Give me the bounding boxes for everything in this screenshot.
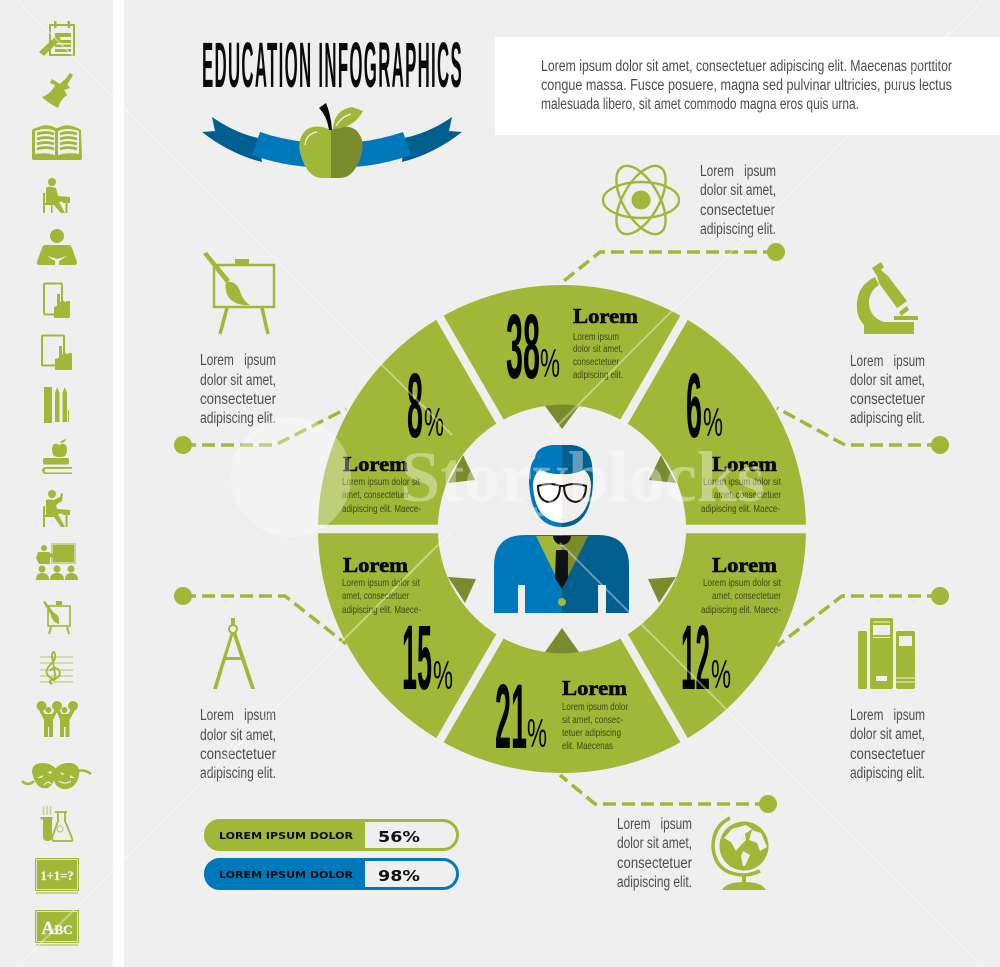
segment: 38%: Lorem [573,304,639,328]
icon: tablet with hand [42,336,72,370]
icon: books [858,618,915,689]
label: globe text: dolor sit amet, [617,835,692,852]
segment: 12%: Lorem [712,553,778,577]
icon: math board: 1+1=? [40,869,74,883]
icon: teacher at board [36,544,78,580]
icon: reading person [37,229,77,265]
segment: 12% [681,553,781,709]
segment: 21%: 21 [495,666,527,768]
icon: alphabet board [35,910,79,946]
segment: 21%: Lorem ipsum dolor [562,701,628,713]
segment: 6%: Lorem ipsum dolor sit [703,476,781,488]
connector dots [174,243,949,813]
segment: 8%: Lorem [343,452,409,476]
segment: 38%: adipiscing elit. [573,369,623,381]
label: atom text: adipiscing elit. [700,221,776,238]
segment: 21%: % [527,712,547,756]
segment: 8%: amet, consectetuer [342,489,409,501]
icon: alphabet board: ABC [41,918,73,938]
progress bar: 56%: LOREM IPSUM DOLOR [219,831,353,842]
icon: calendar and pencil [39,21,74,56]
panel: icon sidebar [22,21,91,946]
segment: 15%: Lorem [343,553,409,577]
icon: treble clef [40,652,73,684]
connector: bottom [560,775,768,804]
label: microscope text: adipiscing elit. [850,410,925,427]
segment: 6% [686,355,781,515]
segment: 12%: adipiscing elit. Maece- [701,604,781,616]
label: compass text: dolor sit amet, [200,727,276,744]
segment: 38%: 38 [506,296,540,398]
progress bar: 56%: 56% [378,828,420,846]
text block: intro panel: malesuada libero, sit amet commodo magna eros quis urna. [541,96,859,113]
segment: 6%: 6 [686,355,702,457]
label: atom text: dolor sit amet, [700,182,776,199]
progress bar: 98%: 98% [378,867,420,885]
icon: globe [713,818,768,890]
figure: teacher with glasses [494,445,629,613]
segment: 12%: % [711,653,731,697]
connector: right bottom [777,596,940,646]
icon: open book [32,125,82,160]
label: easel text: dolor sit amet, [200,372,276,389]
icon: easel and brush [203,252,274,334]
icon: microscope [857,262,918,334]
label: atom text [700,163,776,238]
segment: 38%: % [540,342,560,386]
label: microscope text: dolor sit amet, [850,372,925,389]
segment: 6%: amet, consectetuer [714,489,781,501]
icon: math board [35,858,79,894]
label: globe text: adipiscing elit. [617,874,692,891]
segment: 38%: consectetuer [573,356,619,368]
segment: 6%: Lorem [712,452,778,476]
icon: theatre masks [22,763,91,789]
segment: 6%: adipiscing elit. Maece- [701,503,780,515]
segment: 8%: 8 [407,355,423,457]
icon: drawing compass [213,618,255,689]
icon: atom [603,158,679,242]
segment: 21%: tetuer adipiscing [562,727,621,739]
label: atom text: consectetuer [700,202,775,219]
label: globe text [617,816,692,891]
label: easel text: adipiscing elit. [200,410,276,427]
text block: intro panel [495,37,1000,135]
segment: 12%: 12 [681,607,710,709]
icon: ribbon and apple [202,103,462,178]
icon: student raising hand [43,490,70,527]
label: books text: Lorem ipsum [850,707,925,724]
connector: left bottom [183,596,346,644]
label: atom text: Lorem ipsum [700,163,776,180]
text: 15 [402,607,432,709]
label: books text: dolor sit amet, [850,726,925,743]
progress bar: 98% [204,858,458,890]
icon: small easel [43,601,70,634]
label: easel text [200,352,276,427]
label: easel text: consectetuer [200,391,276,408]
label: globe text: consectetuer [617,855,692,872]
label: books text [850,707,925,782]
label: compass text: consectetuer [200,746,276,763]
segment: 38%: Lorem ipsum [573,331,619,343]
label: microscope text: Lorem ipsum [850,353,925,370]
segment: 38%: dolor sit amet, [573,343,623,355]
label: compass text [200,707,276,782]
segment: 21%: elit. Maecenas [562,740,613,752]
segment: 15% [342,553,453,709]
segment: 8%: Lorem ipsum dolor sit [342,476,420,488]
icon: phone with hand [44,284,70,318]
segment: 8%: % [424,401,444,445]
segment: 15%: adipiscing elit. Maece- [342,604,421,616]
label: microscope text: consectetuer [850,391,925,408]
icon: cheerleaders [36,701,78,737]
segment: 15%: % [433,654,453,698]
icon: apple on books [42,439,72,474]
icon: lab flasks [40,806,72,841]
watermark: Storyblocks [400,437,765,517]
progress bar: 56% [204,819,458,851]
label: easel text: Lorem ipsum [200,352,276,369]
segment: 21%: Lorem [562,676,628,700]
segment: 8% [342,355,444,515]
label: globe text: Lorem ipsum [617,816,692,833]
connector: left top [183,409,346,445]
segment: 6%: % [703,401,723,445]
segment: 12%: Lorem ipsum dolor sit [703,577,781,589]
segment: 21%: sit amet, consec- [562,714,623,726]
label: books text: consectetuer [850,746,925,763]
label: microscope text [850,353,925,427]
segment: 15%: Lorem ipsum dolor sit [342,577,420,589]
segment: 15%: amet, consectetuer [342,590,409,602]
label: compass text: Lorem ipsum [200,707,276,724]
connector: right top [777,408,940,445]
label: compass text: adipiscing elit. [200,765,276,782]
icon: ruler and pencils [44,387,69,423]
chart: segmented ring [310,311,814,747]
segment: 8%: adipiscing elit. Maece- [342,503,421,515]
icon: seated student [43,178,70,213]
segment: 12%: amet, consectetuer [712,590,781,602]
icon: bell [42,73,73,108]
label: books text: adipiscing elit. [850,765,925,782]
progress bar: 98%: LOREM IPSUM DOLOR [219,870,353,881]
connector: top [560,252,776,284]
